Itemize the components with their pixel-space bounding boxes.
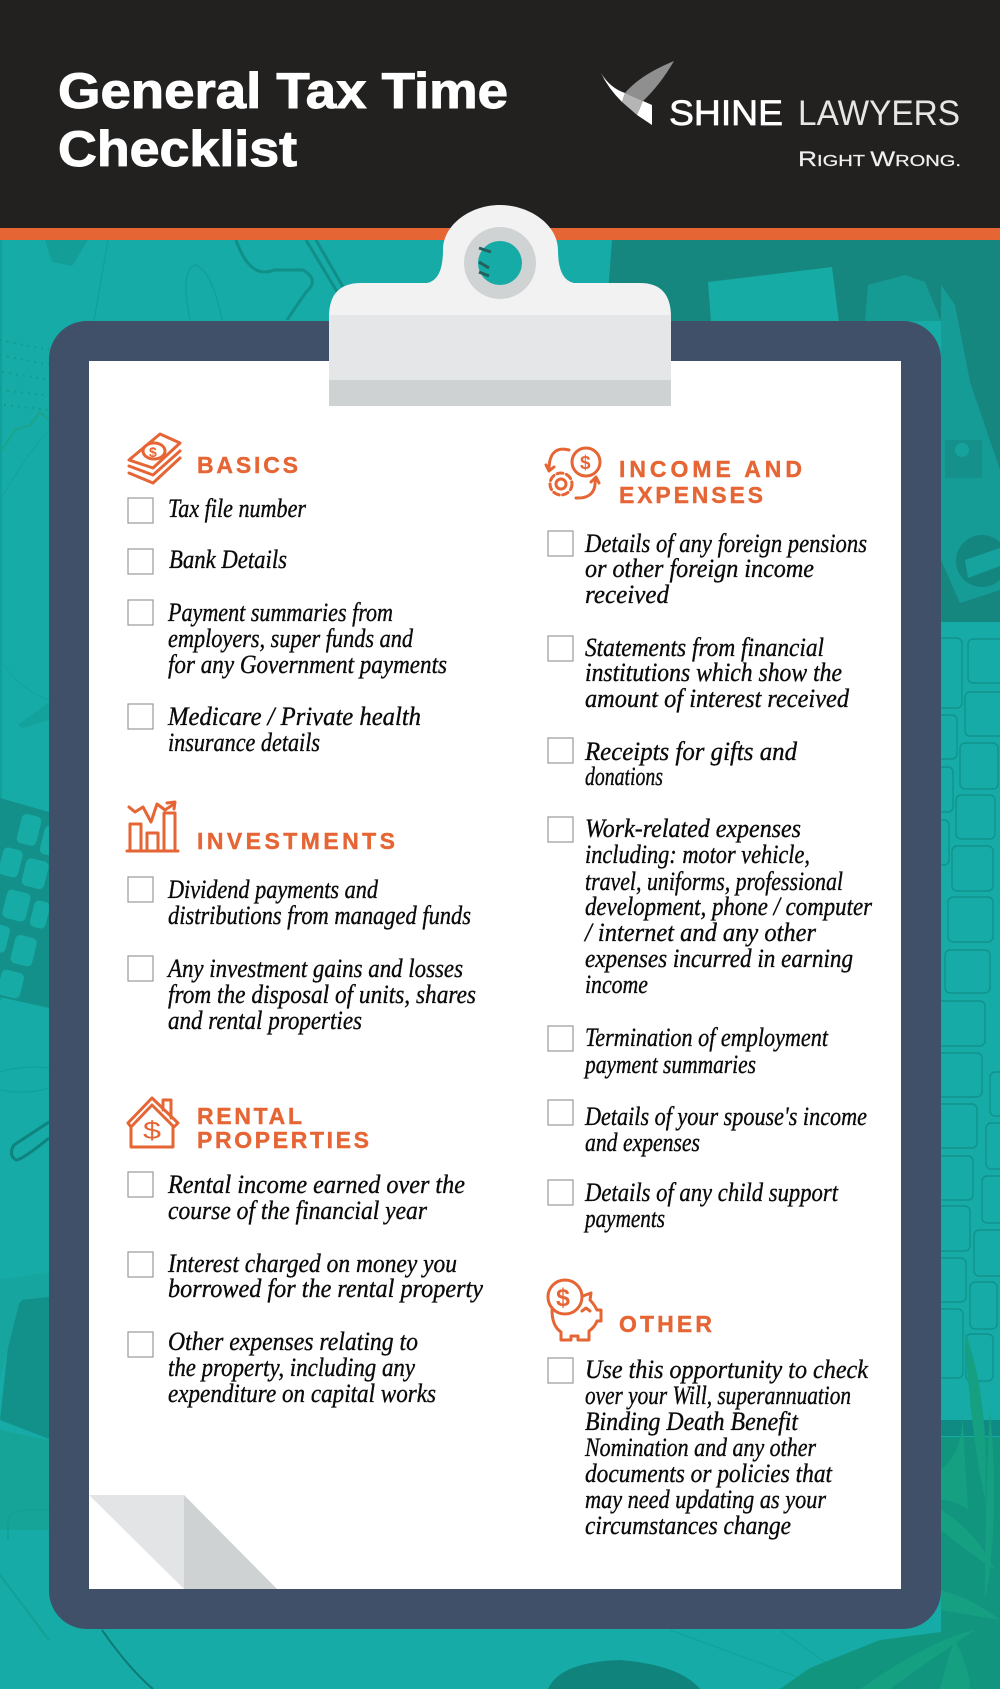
logo: Shine Lawyers: SHINE [669,94,783,133]
item: interest charged [128,1249,483,1303]
item: medicare [128,702,421,757]
plant [780,1437,1000,1689]
item: payment summaries: employers, super funds and [168,624,414,653]
item: foreign pensions: received [585,580,670,609]
item: work-related expenses: expenses incurred in earning [585,944,853,973]
orange stripe [0,228,1000,240]
item: use this opportunity [548,1355,868,1540]
item: spouse income: and expenses [585,1128,700,1157]
heading: rental properties: PROPERTIES [197,1127,369,1153]
icon: bar chart with trend [127,802,178,851]
title: Checklist [58,121,297,177]
item: investment gains: Any investment gains and losses [166,954,463,983]
item: use this opportunity: Nomination and any other [584,1433,817,1462]
item: foreign pensions: Details of any foreign pensions [584,529,867,558]
item: work-related expenses: development, phone / computer [585,892,873,921]
item: use this opportunity: Use this opportunity to check [585,1355,868,1384]
heading: basics: BASICS [197,452,298,478]
icon: gear and dollar cycle: $ [580,453,591,474]
item: work-related expenses: / internet and any other [583,918,817,947]
item: dividend payments: Dividend payments and [167,875,379,904]
item: rental income [128,1170,465,1225]
item: payment summaries: Payment summaries from [167,598,393,627]
item: receipts: Receipts for gifts and [584,737,798,766]
item: tax file number [128,494,307,523]
item: other expenses [128,1327,436,1408]
logo: Shine Lawyers [601,61,961,171]
icon: stack of money: $ [149,444,157,460]
item: statements: institutions which show the [585,658,842,687]
calculator left [0,798,49,1008]
item: child support: payments [583,1204,665,1233]
item: interest charged: Interest charged on money you [167,1249,457,1278]
phone dark left [0,1297,49,1439]
item: work-related expenses: income [585,970,648,999]
item: investment gains: from the disposal of units, shares [168,980,476,1009]
icon: stack of money [129,434,180,483]
item: receipts: donations [585,762,663,791]
item: medicare: Medicare / Private health [167,702,421,731]
item: foreign pensions: or other foreign income [585,554,814,583]
header band [0,0,1000,228]
item: termination [548,1023,829,1079]
icon: house with dollar: $ [143,1117,161,1145]
heading: rental properties [197,1103,369,1153]
heading: investments: INVESTMENTS [197,828,395,854]
item: work-related expenses [548,814,873,999]
item: statements: amount of interest received [585,684,850,713]
item: dividend payments: distributions from managed funds [168,901,471,930]
title: General Tax Time [58,63,508,119]
dark laptop region top right [606,240,1000,622]
item: dividend payments [128,875,471,930]
icon: swoosh tick [601,61,674,125]
item: use this opportunity: over your Will, superannuation [585,1381,851,1410]
icon: gear and dollar cycle [546,448,600,498]
clipboard board [49,321,941,1629]
item: use this opportunity: documents or policies that [585,1459,833,1488]
icon: piggy bank with coin [548,1280,601,1340]
item: child support [548,1178,839,1233]
item: receipts [548,737,798,791]
heading: income and expenses: EXPENSES [619,482,763,508]
folded paper corner [89,1495,277,1589]
heading: income and expenses [619,456,802,508]
item: rental income: Rental income earned over the [167,1170,465,1199]
icon: house with dollar [128,1098,178,1147]
heading: rental properties: RENTAL [197,1103,302,1129]
panel: other [548,1280,868,1540]
item: termination: Termination of employment [585,1023,829,1052]
item: other expenses: the property, including any [168,1353,415,1382]
heading: other: OTHER [619,1311,712,1337]
item: bank details [128,545,287,574]
item: tax file number: Tax file number [168,494,307,523]
item: payment summaries: for any Government payments [168,650,447,679]
item: foreign pensions [548,529,867,609]
item: work-related expenses: including: motor vehicle, [585,840,810,869]
item: spouse income: Details of your spouse's income [584,1102,867,1131]
item: medicare: insurance details [168,728,320,757]
heading: income and expenses: INCOME AND [619,456,802,482]
item: statements: Statements from financial [585,633,824,662]
item: investment gains [128,954,476,1035]
item: other expenses: Other expenses relating to [168,1327,418,1356]
item: child support: Details of any child support [584,1178,839,1207]
item: use this opportunity: may need updating as your [585,1485,827,1514]
item: interest charged: borrowed for the rental property [168,1274,483,1303]
item: other expenses: expenditure on capital works [168,1379,436,1408]
panel: basics [128,434,447,757]
item: rental income: course of the financial year [168,1196,428,1225]
item: use this opportunity: Binding Death Benefit [585,1407,799,1436]
logo: Shine Lawyers: RIGHT W RONG. [798,148,961,171]
item: spouse income [548,1100,867,1157]
item: use this opportunity: circumstances change [585,1511,791,1540]
icon: piggy bank with coin: $ [556,1284,570,1312]
title [58,63,508,177]
item: termination: payment summaries [583,1050,756,1079]
item: payment summaries [128,598,447,679]
item: investment gains: and rental properties [168,1006,362,1035]
keyboard keys [935,638,1000,1381]
panel: investments [127,802,476,1035]
panel: rental properties [128,1098,483,1408]
item: statements [548,633,850,713]
logo: Shine Lawyers: LAWYERS [798,94,960,133]
panel: income and expenses [546,448,873,1233]
clipboard clip [329,205,671,406]
item: bank details: Bank Details [169,545,287,574]
paper sheet [89,361,901,1589]
item: work-related expenses: travel, uniforms, professional [585,867,843,896]
bottom objects [102,1630,153,1689]
item: work-related expenses: Work-related expenses [585,814,801,843]
